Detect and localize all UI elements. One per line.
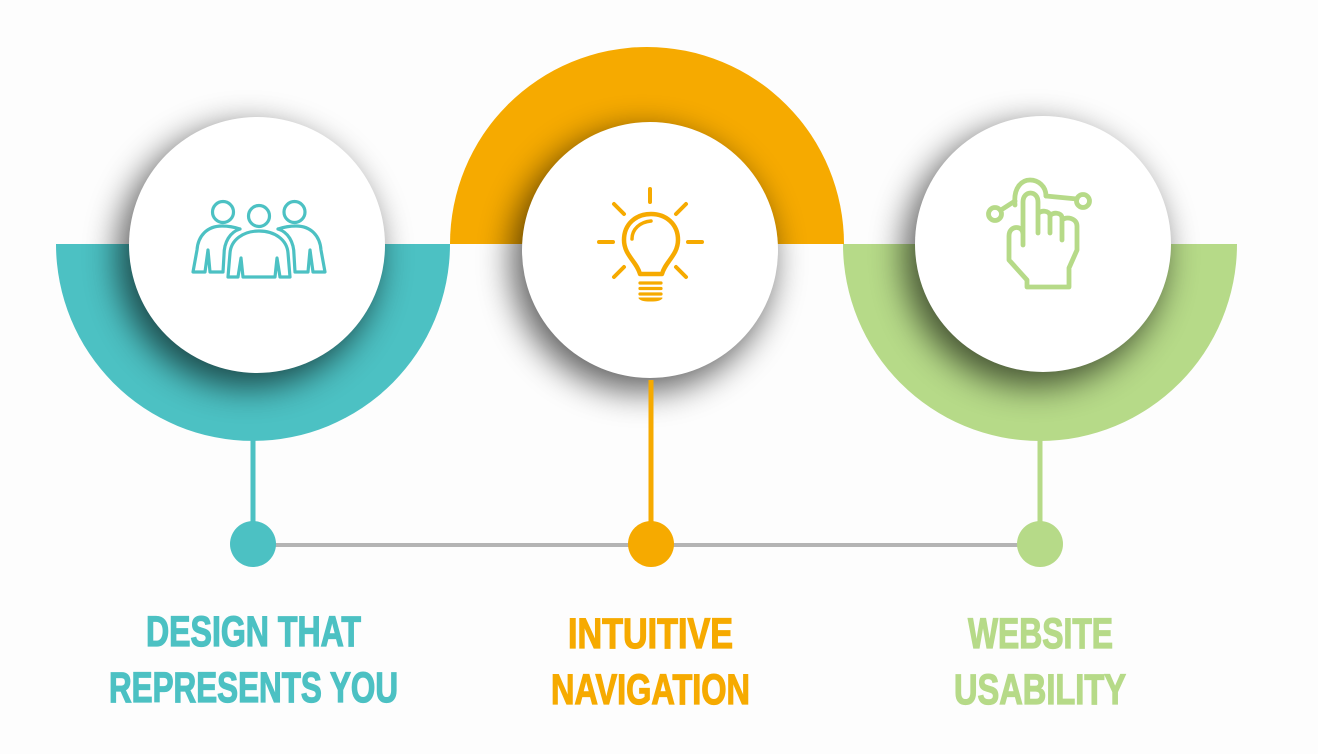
teal circle shadow	[118, 127, 378, 387]
teal stem	[250, 440, 256, 530]
label: intuitive navigation: NAVIGATION	[551, 666, 750, 714]
label: design that represents you: REPRESENTS YOU	[109, 664, 398, 712]
orange dot	[628, 521, 674, 567]
connector line	[253, 543, 1040, 547]
panel: navigation	[450, 47, 844, 567]
icon: hand touch	[988, 180, 1090, 287]
green circle shadow	[904, 126, 1164, 386]
panel: usability	[843, 116, 1237, 567]
white circle	[915, 116, 1171, 372]
icon: light bulb	[599, 189, 702, 301]
white circle	[522, 122, 778, 378]
label: website usability	[954, 610, 1126, 714]
white circle	[129, 117, 385, 373]
label: design that represents you	[109, 608, 398, 712]
label: website usability: USABILITY	[954, 666, 1126, 714]
orange half ring	[450, 47, 844, 244]
panel: design	[56, 117, 450, 567]
label: website usability: WEBSITE	[968, 610, 1113, 658]
orange stem	[648, 380, 654, 530]
green half ring	[843, 244, 1237, 441]
icon: people	[193, 202, 325, 277]
label: intuitive navigation: INTUITIVE	[568, 610, 733, 658]
label: design that represents you: DESIGN THAT	[146, 608, 361, 656]
label: intuitive navigation	[551, 610, 750, 714]
orange circle shadow	[512, 131, 772, 391]
teal dot	[230, 521, 276, 567]
green stem	[1038, 440, 1042, 530]
green dot	[1017, 521, 1063, 567]
teal half ring	[56, 244, 450, 441]
